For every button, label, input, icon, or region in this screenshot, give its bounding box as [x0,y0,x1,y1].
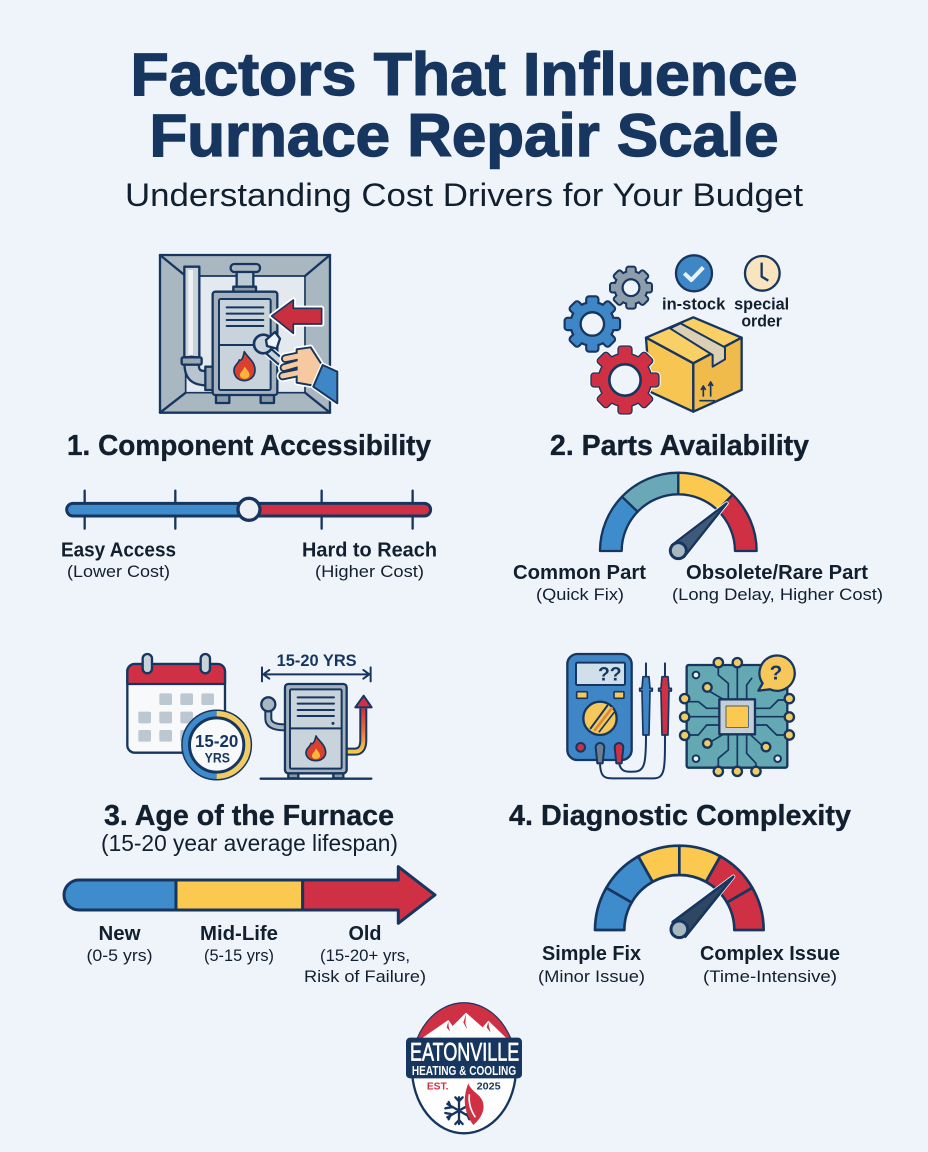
label: simple fix: (Minor Issue) [538,967,645,986]
label: old: Risk of Failure) [304,967,426,986]
label: easy access: (Lower Cost) [67,562,170,581]
label: old: Old [348,923,382,945]
logo: Eatonville Heating and Cooling: EATONVILLE [410,1040,519,1067]
label: mid-life [200,923,278,965]
label: old [304,923,426,986]
label: simple fix: Simple Fix [542,943,641,965]
icon: gears, badges and cardboard box [566,255,789,413]
heading: 3. Age of the Furnace [104,800,394,832]
label: easy access [61,540,176,581]
label: complex issue [700,943,840,986]
icon: furnace in a cabinet with wrench and hand [160,255,337,413]
label: complex issue: Complex Issue [700,943,840,965]
panel: component accessibility [61,255,437,581]
heading: 2. Parts Availability [550,430,809,462]
label: hard to reach: (Higher Cost) [315,562,424,581]
arrow: lifespan timeline [64,867,435,923]
label: mid-life: (5-15 yrs) [204,946,274,965]
label: obsolete or rare part: Obsolete/Rare Part [686,562,868,584]
heading: 4. Diagnostic Complexity [509,800,851,832]
icon: gears, badges and cardboard box: order [741,313,783,331]
icon: calendar with lifespan badge and furnace [127,651,372,779]
panel: diagnostic complexity [509,654,851,986]
label: old: (15-20+ yrs, [320,946,410,965]
label: obsolete or rare part: (Long Delay, Higher Cost) [672,585,883,604]
title [130,41,798,169]
icon: multimeter and circuit board [567,654,795,778]
label: new: (0-5 yrs) [86,946,152,965]
label: common part: (Quick Fix) [536,585,624,604]
icon: multimeter and circuit board: ?? [598,665,622,686]
icon: calendar with lifespan badge and furnace: 15-20 YRS [277,651,357,670]
logo: Eatonville Heating and Cooling: HEATING & COOLING [412,1063,516,1078]
title: Factors That Influence [130,41,798,108]
logo: Eatonville Heating and Cooling: 2025 [477,1082,501,1093]
subheading: (15-20 year average lifespan) [101,830,398,856]
logo: Eatonville Heating and Cooling [406,1000,522,1133]
label: complex issue: (Time-Intensive) [703,967,837,986]
label: obsolete or rare part [672,562,883,604]
icon: calendar with lifespan badge and furnace: 15-20 [195,731,238,751]
icon: calendar with lifespan badge and furnace: YRS [205,751,230,766]
panel: age of the furnace [64,651,435,986]
gauge: diagnostic complexity [595,846,764,938]
label: simple fix [538,943,645,986]
gauge: parts availability [600,473,757,559]
heading: 1. Component Accessibility [67,430,431,462]
label: new: New [98,923,141,945]
label: hard to reach: Hard to Reach [302,540,437,562]
label: new [86,923,152,965]
subtitle: Understanding Cost Drivers for Your Budget [125,177,803,213]
label: common part: Common Part [513,562,646,584]
icon: multimeter and circuit board: ? [770,661,782,684]
panel: parts availability [513,255,883,604]
slider scale [67,491,431,529]
label: hard to reach [302,540,437,581]
label: common part [513,562,646,604]
logo: Eatonville Heating and Cooling: EST. [427,1082,449,1093]
title: Furnace Repair Scale [150,102,778,169]
icon: gears, badges and cardboard box: in-stock [662,295,726,313]
label: easy access: Easy Access [61,540,176,562]
icon: gears, badges and cardboard box: special [734,295,789,313]
label: mid-life: Mid-Life [200,923,278,945]
